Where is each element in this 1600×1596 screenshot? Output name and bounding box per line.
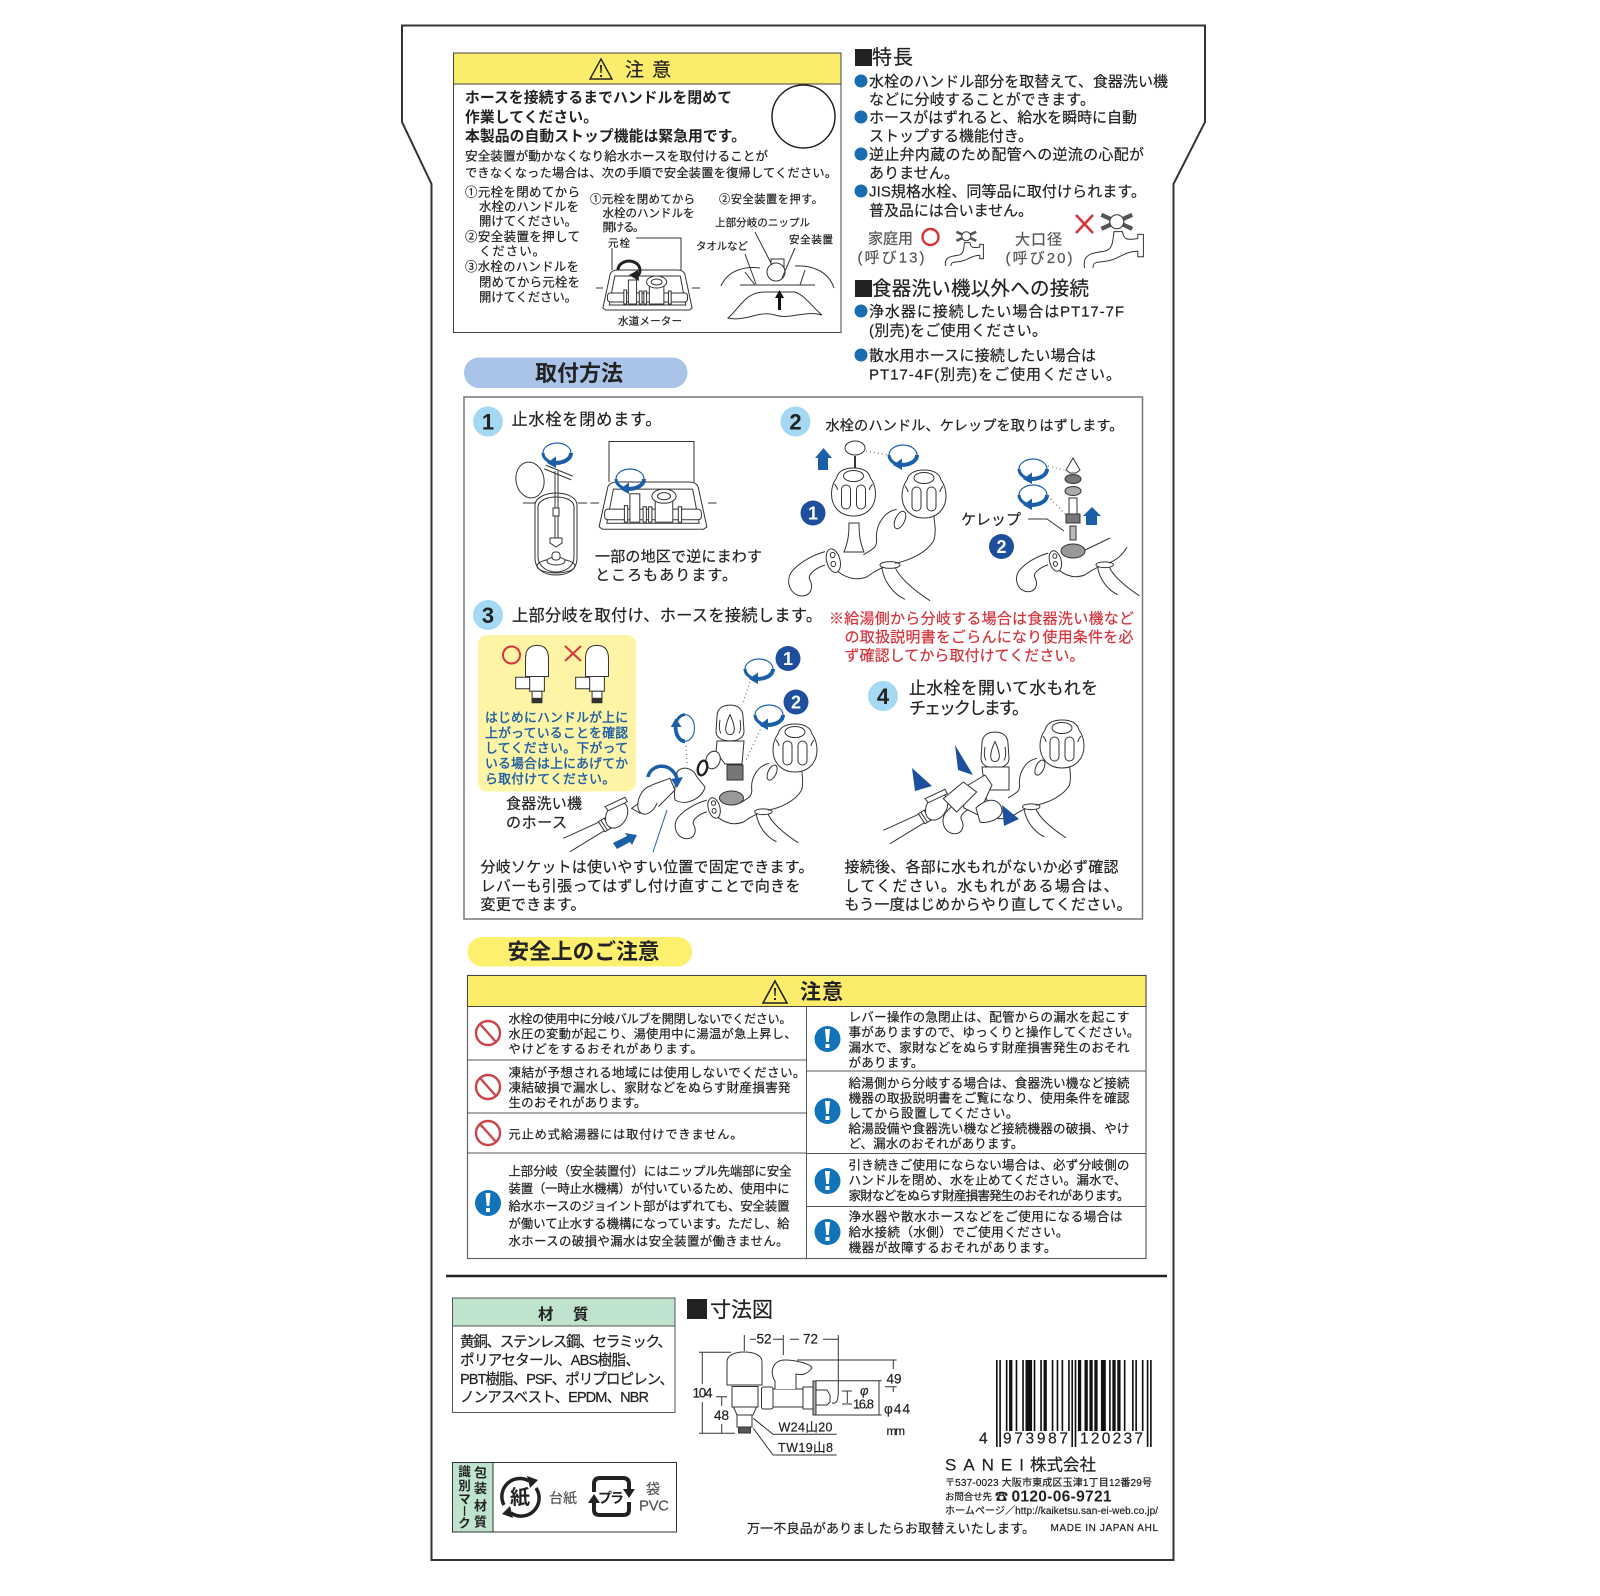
right column text: ハンドルを閉め、水を止めてください。漏水で、 [848, 1172, 1126, 1188]
caution bold text: 作業してください。 [465, 108, 598, 126]
panel: materials: ポリアセタール、ABS樹脂、 [460, 1352, 640, 1369]
right column text: 家財などをぬらす財産損害発生のおそれがあります。 [848, 1188, 1130, 1203]
reset illustration labels: タオルなど [696, 240, 748, 252]
features bullets: などに分岐することができます。 [869, 92, 1095, 108]
left column text: 水ホースの破損や漏水は安全装置が働きません。 [508, 1234, 788, 1248]
icon: paper recycle: 紙 [510, 1486, 530, 1509]
step 1 heading: 止水栓を閉めます。 [512, 411, 662, 429]
chart: dimension drawing: 72 [803, 1332, 818, 1346]
icon: water meter with leader [596, 238, 700, 310]
step 4 heading: チェックします。 [909, 699, 1029, 718]
red note: ※給湯側から分岐する場合は食器洗い機など [829, 610, 1134, 628]
vertical label: ー [457, 1505, 471, 1517]
vertical label: マ [458, 1492, 471, 1506]
callout: handle position: はじめにハンドルが上に [485, 710, 628, 725]
large faucet not ok: (呼び20) [1006, 250, 1072, 267]
reset steps text: 開けてください。 [479, 290, 577, 304]
panel: installation steps [464, 397, 1142, 919]
features bullets: 普及品には合いません。 [869, 202, 1033, 220]
panel: materials: 質 [573, 1306, 589, 1324]
company info: 株式会社 [1030, 1456, 1096, 1474]
reset steps text: 開けてください。 [479, 214, 577, 228]
step 4 text: 接続後、各部に水もれがないか必ず確認 [844, 859, 1118, 876]
left column text: 装置（一時止水機構）が付いているため、使用中に [508, 1181, 790, 1196]
panel: materials [452, 1298, 675, 1412]
step 4 text [844, 859, 1132, 914]
blank circle [772, 85, 835, 148]
chart: dimension drawing: 52 [756, 1332, 772, 1346]
step 3 heading [473, 600, 822, 630]
right column text: してから設置してください。 [848, 1106, 1018, 1120]
company info: 〒537-0023 大阪市東成区玉津1丁目12番29号 [945, 1476, 1152, 1489]
features bullets: 水栓のハンドル部分を取替えて、食器洗い機 [869, 74, 1168, 90]
reset illustration labels: 水道メーター [618, 314, 682, 328]
reset illustration labels: ②安全装置を押す。 [719, 192, 823, 206]
features bullets: ホースがはずれると、給水を瞬時に自動 [869, 110, 1137, 126]
household faucet ok: (呼び13) [858, 250, 924, 266]
step 3 heading: 3 [482, 603, 494, 628]
reset steps text [465, 186, 580, 304]
household faucet ok: 家庭用 [868, 230, 913, 248]
caution bold text [465, 88, 746, 145]
large faucet not ok [1006, 215, 1143, 268]
vertical label: ク [458, 1516, 471, 1530]
household faucet ok [858, 229, 983, 266]
label: bag PVC [639, 1481, 669, 1514]
left column text: 元止め式給湯器には取付けできません。 [508, 1128, 742, 1142]
features bullets: ストップする機能付き。 [869, 128, 1033, 145]
panel: materials: ノンアスベスト、EPDM、NBR [460, 1390, 649, 1406]
step 1 note [595, 548, 762, 584]
company info: お問合せ先 [945, 1491, 992, 1503]
heading: installation method: 取付方法 [535, 361, 623, 386]
right column text: 事がありますので、ゆっくりと操作してください。 [848, 1024, 1140, 1040]
heading: dimensions: 寸法図 [710, 1299, 773, 1322]
reset illustration labels: 上部分岐のニップル [715, 216, 810, 229]
step 2 illustration: washer removal: 2 [996, 537, 1007, 557]
other connection text: PT17-4F(別売)をご使用ください。 [869, 366, 1121, 384]
chart: dimension drawing: 104 [692, 1386, 713, 1400]
caution bold text: 本製品の自動ストップ機能は緊急用です。 [465, 127, 746, 145]
barcode: 973987 [1003, 1430, 1068, 1448]
vertical label: 包 [474, 1466, 487, 1480]
company info: ホームページ／http://kaiketsu.san-ei-web.co.jp/ [945, 1505, 1158, 1517]
step 4 text: もう一度はじめからやり直してください。 [844, 896, 1132, 914]
chart: dimension drawing: φ [860, 1383, 869, 1398]
right column text: 機器の取扱説明書をご覧になり、使用条件を確認 [848, 1090, 1130, 1106]
label: bag PVC: PVC [639, 1498, 669, 1514]
caution header band [454, 53, 841, 84]
left column text: 給水ホースのジョイント部がはずれても、安全装置 [508, 1198, 790, 1214]
caution intro text: できなくなった場合は、次の手順で安全装置を復帰してください。 [465, 165, 837, 180]
reset illustration labels: ①元栓を閉めてから [590, 192, 695, 206]
panel: materials: 黄銅、ステンレス鋼、セラミック、 [460, 1334, 672, 1350]
panel: caution box [454, 53, 841, 332]
prohibit icons [476, 1021, 500, 1145]
step 1 heading: 1 [482, 410, 494, 434]
step 2 heading: 2 [789, 410, 802, 434]
features heading: 特長 [872, 46, 913, 69]
reset steps text: 閉めてから元栓を [479, 276, 580, 290]
vertical label: 材 [474, 1498, 487, 1514]
right column text: 機器が故障するおそれがあります。 [848, 1241, 1056, 1255]
table header: 注意 [800, 981, 843, 1004]
heading: installation method [464, 358, 688, 388]
red note [829, 610, 1134, 664]
right column text: 引き続きご使用にならない場合は、必ず分岐側の [848, 1158, 1130, 1172]
callout: handle position: 上がっていることを確認 [485, 726, 628, 740]
panel: materials: 材 [538, 1304, 554, 1324]
chart: dimension drawing: 48 [714, 1408, 729, 1423]
label: bag PVC: 袋 [646, 1481, 660, 1497]
left column text: やけどをするおそれがあります。 [508, 1041, 702, 1056]
callout: handle position [478, 635, 636, 792]
panel: caution table [468, 976, 1146, 1258]
right column text: 浄水器や散水ホースなどをご使用になる場合は [848, 1209, 1122, 1224]
right column text: があります。 [848, 1056, 924, 1070]
callout: handle position: ら取付けてください。 [485, 772, 615, 786]
step 4 heading [868, 679, 1098, 718]
icon: paper recycle [502, 1476, 539, 1518]
right column text [848, 1010, 1140, 1255]
chart: dimension drawing: 16.8 [853, 1396, 874, 1412]
label: dishwasher hose [506, 796, 582, 832]
step 3 illustration: valve and hose assembly: 1 [783, 649, 793, 669]
step 1 illustration: stop valve pit [513, 443, 587, 575]
reset illustration labels: 水栓のハンドルを [602, 206, 694, 220]
made in japan: MADE IN JAPAN AHL [1050, 1523, 1158, 1534]
left column text: が働いて止水する機構になっています。ただし、給 [508, 1216, 790, 1231]
features bullets: ありません。 [869, 165, 959, 182]
right column text: 給水接続（水側）でご使用ください。 [848, 1224, 1068, 1240]
vertical label: 別 [458, 1479, 471, 1493]
features heading [855, 46, 913, 69]
step 2 illustration: handle removal [789, 441, 946, 601]
reset illustration labels: 開ける。 [602, 221, 644, 234]
callout: handle position: いる場合は上にあげてか [485, 756, 628, 771]
barcode: 4 [979, 1430, 988, 1448]
step 3 illustration: valve and hose assembly: 2 [791, 692, 801, 712]
step 3 heading: 上部分岐を取付け、ホースを接続します。 [512, 607, 822, 625]
reset steps text: ください。 [479, 244, 545, 258]
right column text: レバー操作の急閉止は、配管からの漏水を起こす [848, 1010, 1130, 1024]
caution intro text: 安全装置が動かなくなり給水ホースを取付けることが [465, 150, 768, 164]
table header [468, 976, 1146, 1006]
caution bold text: ホースを接続するまでハンドルを閉めて [465, 88, 732, 106]
step 3 text [480, 859, 814, 914]
left column text: 上部分岐（安全装置付）にはニップル先端部に安全 [508, 1164, 792, 1178]
reset steps text: ②安全装置を押して [465, 230, 580, 244]
step 3 text: 分岐ソケットは使いやすい位置で固定できます。 [480, 859, 814, 876]
features bullets [854, 74, 1168, 220]
chart: dimension drawing: TW19山8 [778, 1441, 833, 1455]
step 1 heading [473, 406, 662, 436]
caution intro text [465, 150, 837, 180]
mandatory icons [475, 1026, 840, 1245]
large faucet not ok: 大口径 [1015, 232, 1062, 248]
step 4 heading: 止水栓を開いて水もれを [909, 679, 1098, 698]
package outline [402, 26, 1205, 1560]
vertical label: 装 [474, 1481, 487, 1496]
heading: safety precautions: 安全上のご注意 [508, 939, 660, 964]
reset illustration labels: 安全装置 [789, 233, 834, 246]
step 3 illustration: valve and hose assembly [563, 646, 817, 852]
left column text: 生のおそれがあります。 [508, 1096, 646, 1110]
callout: handle position: してください。下がって [485, 740, 628, 756]
reset illustration labels [590, 192, 834, 328]
vertical label: 質 [474, 1514, 487, 1530]
step 4 illustration: leak check [883, 720, 1084, 844]
other connection text [854, 304, 1124, 384]
company info: 0120-06-9721 [1012, 1488, 1112, 1506]
other connection text: 浄水器に接続したい場合はPT17-7F [869, 304, 1124, 320]
chart: dimension drawing: 49 [886, 1372, 902, 1386]
step 1 note: 一部の地区で逆にまわす [595, 548, 762, 566]
reset steps text: ③水栓のハンドルを [465, 260, 579, 274]
label: dishwasher hose: 食器洗い機 [506, 796, 582, 812]
step 2 illustration: washer removal [961, 458, 1140, 596]
step 3 text: レバーも引張ってはずし付け直すことで向きを [480, 878, 800, 895]
left column text: 水栓の使用中に分岐バルブを開閉しないでください。 [508, 1011, 792, 1026]
left column text [508, 1011, 806, 1248]
red note: ず確認してから取付けてください。 [844, 648, 1084, 664]
chart: dimension drawing [692, 1332, 910, 1455]
reset illustration labels: 元栓 [608, 236, 630, 250]
icon: hands pressing safety device [721, 232, 834, 319]
left column text: 凍結破損で漏水し、家財などをぬらす財産損害発 [508, 1080, 791, 1095]
left column text: 凍結が予想される地域には使用しないでください。 [508, 1065, 806, 1080]
left column text: 水圧の変動が起こり、湯使用中に湯温が急上昇し、 [508, 1026, 796, 1041]
features bullets: 逆止弁内蔵のため配管への逆流の心配が [869, 146, 1144, 164]
company info: SANEI [945, 1456, 1024, 1474]
step 2 heading [780, 406, 1124, 436]
chart: dimension drawing: mm [886, 1424, 905, 1438]
caution header band: 注意 [625, 59, 671, 81]
vertical label [457, 1464, 487, 1530]
barcode: 120237 [1080, 1430, 1143, 1448]
company info [945, 1456, 1158, 1517]
step 2 illustration: washer removal: ケレップ [961, 512, 1021, 528]
reset steps text: 水栓のハンドルを [479, 200, 579, 214]
step 2 illustration: handle removal: 1 [808, 504, 818, 524]
label: dishwasher hose: のホース [506, 814, 567, 832]
replacement notice: 万一不良品がありましたらお取替えいたします。 [747, 1521, 1035, 1536]
other connection text: (別売)をご使用ください。 [869, 322, 1047, 340]
right column text: ど、漏水のおそれがあります。 [848, 1136, 1024, 1151]
company info: ☎ [995, 1489, 1008, 1504]
step 4 heading: 4 [877, 684, 890, 709]
vertical label: 識 [458, 1464, 471, 1479]
icon: plastic recycle: プラ [598, 1490, 624, 1506]
chart: dimension drawing: W24山20 [778, 1420, 833, 1434]
other connection heading: 食器洗い機以外への接続 [872, 278, 1089, 300]
step 2 heading: 水栓のハンドル、ケレップを取りはずします。 [826, 418, 1124, 434]
reset steps text: ①元栓を閉めてから [465, 186, 580, 200]
right column text: 漏水で、家財などをぬらす財産損害発生のおそれ [848, 1040, 1130, 1055]
right column text: 給湯側から分岐する場合は、食器洗い機など接続 [848, 1076, 1130, 1090]
icon: plastic recycle [588, 1478, 635, 1515]
right column text: 給湯設備や食器洗い機など接続機器の破損、やけ [848, 1121, 1130, 1136]
heading: safety precautions [468, 937, 692, 966]
chart: dimension drawing: φ44 [884, 1402, 910, 1416]
red note: の取扱説明書をごらんになり使用条件を必 [844, 629, 1134, 646]
barcode [979, 1360, 1152, 1448]
step 1 illustration: meter box [590, 442, 716, 529]
step 3 text: 変更できます。 [480, 896, 586, 914]
panel: materials: PBT樹脂、PSF、ポリプロピレン、 [460, 1371, 674, 1388]
label: backing paper: 台紙 [549, 1490, 577, 1506]
step 4 text: してください。水もれがある場合は、 [844, 878, 1118, 895]
features bullets: JIS規格水栓、同等品に取付けられます。 [869, 182, 1146, 200]
panel: features [854, 46, 1168, 384]
other connection text: 散水用ホースに接続したい場合は [869, 348, 1096, 364]
step 1 note: ところもあります。 [595, 567, 737, 584]
panel: packaging material marks [452, 1462, 676, 1532]
